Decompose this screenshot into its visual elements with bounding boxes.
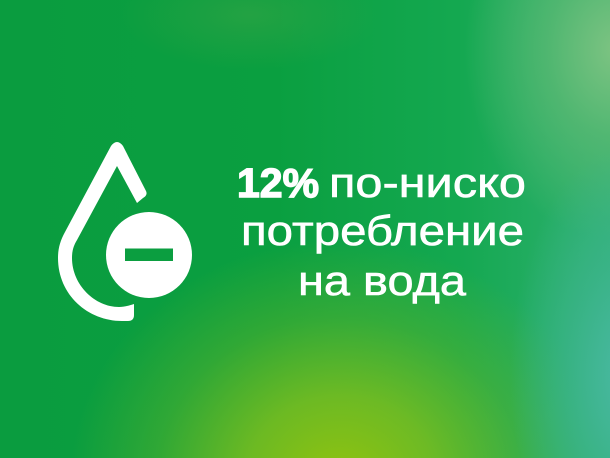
icon: water drop with minus <box>58 142 192 321</box>
line 2: потребление <box>241 207 524 254</box>
minus circle <box>106 212 192 298</box>
drop outline <box>58 142 147 321</box>
line 3: на вода <box>298 257 467 304</box>
line 1: по-ниско <box>329 159 526 206</box>
minus sign <box>125 248 173 261</box>
line 1: 12% <box>237 160 319 206</box>
headline text <box>237 159 526 304</box>
